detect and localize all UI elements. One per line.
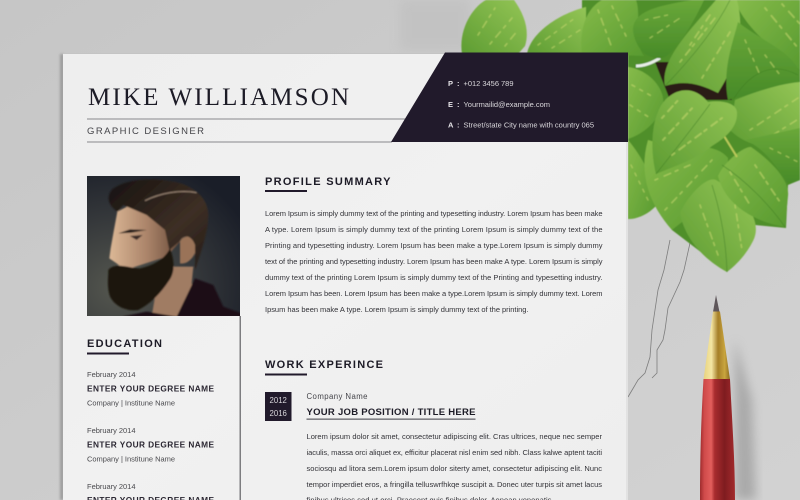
plant leaves	[461, 0, 800, 272]
email: E	[448, 100, 453, 109]
brow and eye	[118, 229, 147, 233]
name heading: MIKE WILLIAMSON	[88, 84, 349, 111]
education entry 1: February 2014	[87, 370, 136, 379]
beard	[108, 248, 174, 310]
marble cracks	[628, 240, 690, 397]
job title subheading: GRAPHIC DESIGNER	[87, 126, 204, 137]
portrait photo	[87, 176, 242, 317]
education entry 2: Company | Institune Name	[87, 454, 175, 464]
leaf: far right lower	[745, 128, 800, 184]
job title: YOUR JOB POSITION / TITLE HERE	[306, 407, 476, 418]
paragraph: A type. Lorem Ipsum is simply dummy text of the printing Lorem Ipsum is simply dummy text of the	[265, 225, 602, 234]
neck	[152, 267, 200, 317]
job description: Lorem ipsum dolor sit amet, consectetur adipiscing elit. Cras ultrices, neque nec semper	[306, 432, 602, 441]
job description: tempor imperdiet eros, a fringilla telluswrfhkqe suscipit a. Donec uter turpis sit amet lacus	[306, 480, 602, 489]
leaf: top left	[461, 0, 527, 54]
leaf: top centre	[581, 0, 644, 56]
stem	[724, 136, 737, 157]
section: profile summary	[265, 176, 603, 314]
phone: :	[457, 79, 460, 88]
paragraph: Lorem Ipsum has been. Lorem Ipsum has been make a type.Lorem Ipsum is simply dummy text. Lorem	[265, 289, 602, 298]
education entry 2	[87, 426, 214, 464]
heading: EDUCATION	[87, 338, 162, 350]
education entry 1	[87, 370, 214, 408]
leaf: lower right	[718, 147, 788, 227]
paper shadow	[60, 54, 64, 500]
dark soil	[655, 62, 732, 100]
address: Street/state City name with country 065	[464, 120, 594, 130]
leaf: lower middle	[644, 140, 728, 230]
leaf: left side upper	[628, 67, 663, 139]
job description: sociosqu ad litora sem.Lorem ipsum dolor siterty amet, consectetur adipiscing elit. Nunc	[306, 464, 602, 473]
paragraph: text of the printing and typesetting industry. Lorem Ipsum has been make A type. Lorem Ipsum is simply	[265, 257, 603, 266]
date badge: 2012	[270, 396, 287, 405]
address: A	[448, 120, 454, 130]
leaf: upper right	[726, 22, 800, 100]
paragraph	[265, 209, 603, 314]
job description: iaculis, massa orci aliquet ex, efficitur placerat nisl enim sed nibh. Class kalwe aptent taciti	[306, 448, 602, 457]
education entry 3	[87, 482, 214, 500]
shaded foliage mass	[582, 0, 800, 272]
leaf: top middle	[527, 7, 586, 54]
section: work experience	[265, 359, 602, 500]
ear	[180, 236, 197, 264]
leaf: upper left of plant	[633, 0, 704, 58]
date badge	[265, 392, 292, 421]
pot rim	[636, 58, 660, 66]
education entry 1: ENTER YOUR DEGREE NAME	[87, 384, 214, 394]
face	[109, 202, 180, 270]
pen	[700, 295, 756, 500]
education entry 1: Company | Institune Name	[87, 398, 175, 408]
leaf: right	[730, 82, 800, 147]
hair	[109, 179, 208, 270]
paragraph: Printing and typesetting industry. Lorem Ipsum has been make a type.Lorem Ipsum is simply dummy	[265, 241, 603, 250]
leaf: bottom tip	[680, 179, 756, 272]
phone: P	[448, 79, 453, 88]
education entry 2: February 2014	[87, 426, 136, 435]
education entry 2: ENTER YOUR DEGREE NAME	[87, 440, 214, 450]
leaf: central heart	[652, 90, 737, 174]
email: :	[457, 100, 460, 109]
paragraph: Lorem Ipsum is simply dummy text of the printing and typesetting industry. Lorem Ipsum has been make	[265, 209, 602, 218]
email: Yourmailid@example.com	[464, 100, 550, 109]
leaf: left side lower	[628, 140, 657, 219]
education entry 3: February 2014	[87, 482, 136, 491]
leaf: large upper	[664, 0, 740, 93]
phone: +012 3456 789	[464, 79, 514, 88]
jacket	[122, 278, 242, 317]
divider: sidebar line	[240, 316, 241, 500]
address: :	[457, 120, 460, 130]
heading: WORK EXPERINCE	[265, 359, 383, 371]
heading: PROFILE SUMMARY	[265, 176, 391, 188]
contact band	[391, 52, 628, 142]
leaf: top right background	[735, 0, 800, 70]
resume page	[63, 52, 628, 500]
paragraph: dummy text of the printing Lorem Ipsum is simply dummy text of the Printing and typesetting industry.	[265, 273, 602, 282]
section: education	[87, 338, 214, 500]
date badge: 2016	[270, 409, 287, 418]
header rule lines	[87, 118, 407, 142]
company name: Company Name	[306, 392, 368, 401]
job description	[306, 432, 602, 500]
paragraph: Ipsum has been make A type. Lorem Ipsum is simply dummy text of the printing.	[265, 305, 528, 314]
